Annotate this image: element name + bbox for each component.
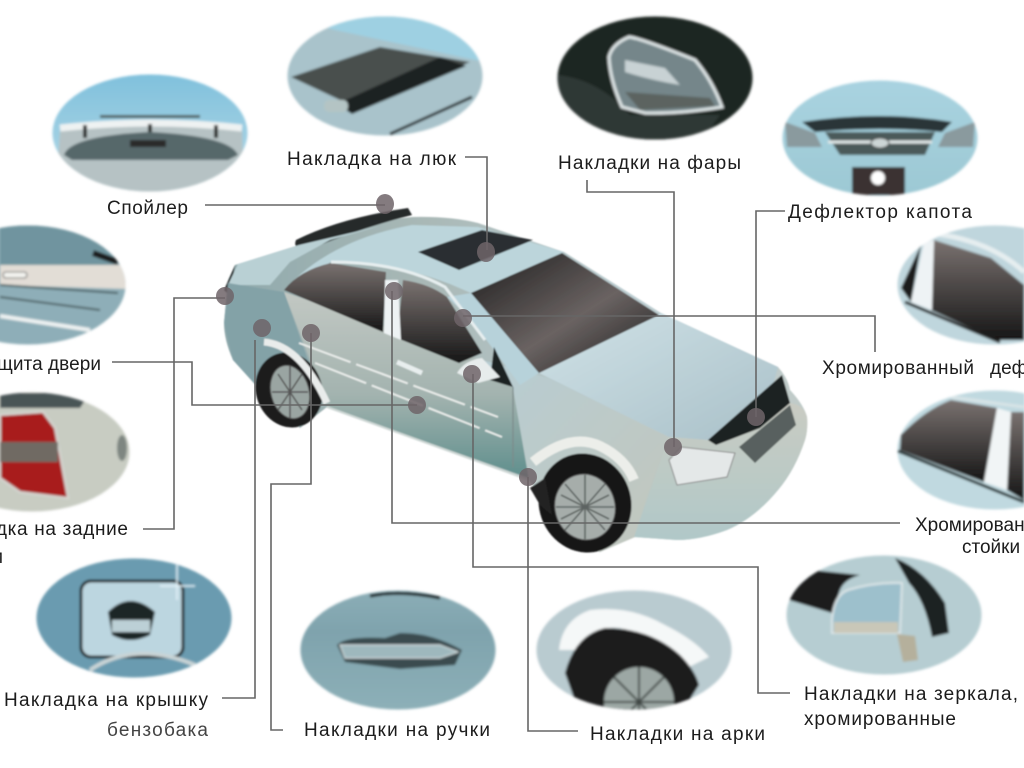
- thumbnail: chrome visor: [895, 223, 1024, 347]
- front chrome arch: [533, 442, 634, 480]
- trunk lid: [228, 226, 380, 285]
- thumbnail: fuel cap cover: [35, 556, 235, 680]
- car illustration: [224, 208, 807, 566]
- label: hood deflector: Дефлектор капота: [788, 202, 972, 223]
- hood: [539, 313, 778, 440]
- sunroof: [418, 230, 533, 270]
- grille: [739, 405, 796, 463]
- rear quarter: [224, 283, 322, 400]
- side mirror: [457, 358, 500, 383]
- lower sill line: [327, 407, 529, 480]
- door handle: [397, 362, 422, 373]
- rear wheel: [245, 343, 333, 437]
- A pillar: [447, 293, 539, 385]
- front bumper: [634, 403, 807, 540]
- side moulding lines: [299, 343, 502, 437]
- roof: [284, 225, 564, 293]
- thumbnail: wheel arch trim: [535, 589, 733, 712]
- label: mirror covers: Накладки на зеркала,: [804, 684, 1018, 705]
- door side panel: [284, 292, 529, 478]
- thumbnail: door protection: [0, 223, 130, 347]
- roof spoiler: [295, 208, 412, 250]
- thumbnail: mirror cover: [783, 553, 985, 677]
- label: sunroof: Накладка на люк: [287, 149, 457, 170]
- rear side window: [284, 263, 386, 332]
- label: spoiler: Спойлер: [107, 198, 188, 219]
- front side window: [397, 280, 482, 363]
- thumbnail: chrome pillars: [895, 388, 1024, 512]
- thumbnail: tail light trim: [0, 390, 134, 514]
- headlight: [669, 447, 735, 485]
- car body: [224, 217, 807, 552]
- label: chrome deflector: Хромированный: [822, 358, 974, 379]
- front fender: [482, 360, 669, 552]
- mirror mount: [490, 347, 513, 387]
- dark mud flap: [530, 478, 552, 515]
- front wheel: [525, 440, 645, 566]
- thumbnail: hood deflector: [780, 78, 980, 200]
- rear chrome arch: [264, 342, 327, 403]
- door seam: [512, 387, 514, 467]
- label: chrome pillars: стойки: [962, 537, 1020, 558]
- thumbnail: door handle: [298, 588, 498, 712]
- leader lines: [112, 157, 900, 731]
- thumbnail: spoiler: [50, 72, 250, 194]
- label: fuel cap: Накладка на крышку: [4, 690, 208, 711]
- label: fuel cap: бензобака: [107, 720, 208, 741]
- windshield: [471, 253, 659, 373]
- hood deflector: [708, 375, 790, 445]
- label: door handles: Накладки на ручки: [304, 720, 490, 741]
- rear spoiler bracket: [224, 265, 235, 296]
- marker dots: [216, 194, 765, 486]
- thumbnail: sunroof deflector: [285, 15, 485, 137]
- chrome window visor: [331, 262, 485, 340]
- label: headlights: Накладки на фары: [558, 153, 741, 174]
- label: mirror covers: хромированные: [804, 709, 956, 730]
- label: wheel arches: Накладки на арки: [590, 724, 765, 745]
- thumbnail: headlight trim: [555, 14, 755, 142]
- chrome door pillar: [384, 280, 401, 340]
